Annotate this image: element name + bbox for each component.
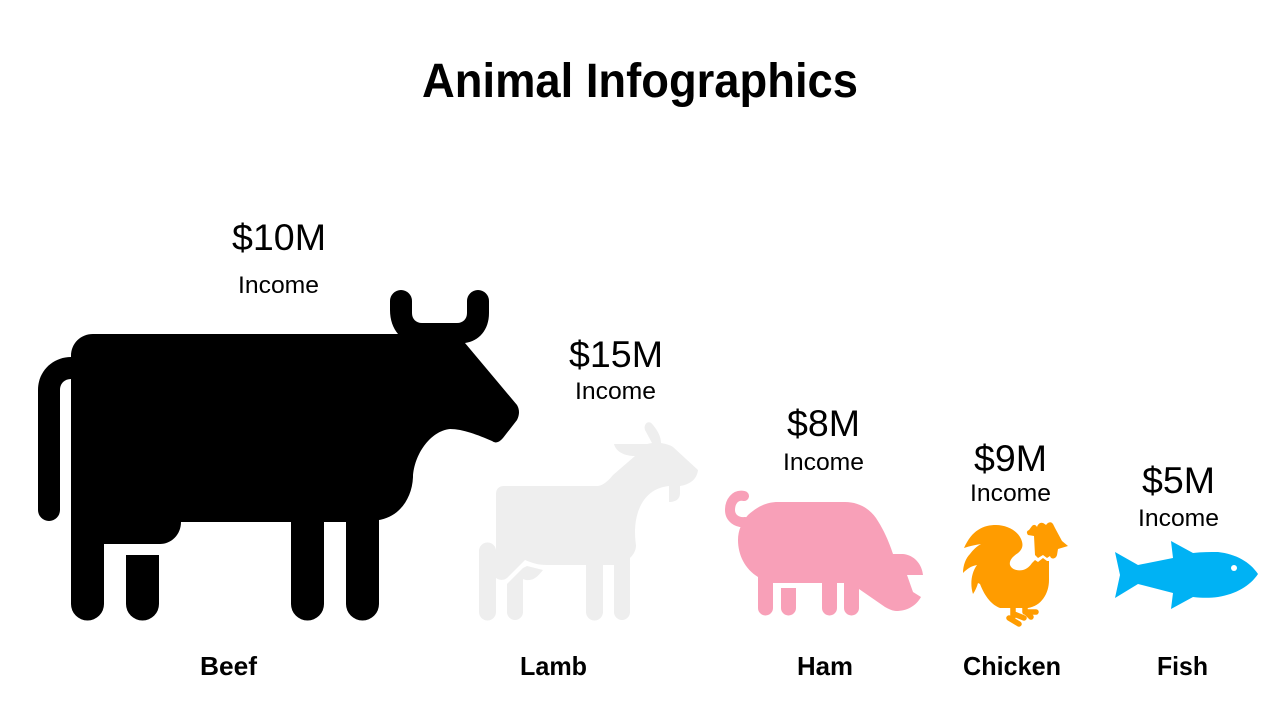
- ham income value: $8M: [787, 403, 860, 444]
- panel: fish: [1115, 460, 1258, 681]
- chicken income value: $9M: [974, 438, 1047, 479]
- icon: fish: [1115, 541, 1258, 609]
- title: Animal Infographics: [422, 55, 858, 108]
- fish income caption: Income: [1138, 505, 1219, 532]
- panel: beef: [38, 217, 519, 681]
- lamb income caption: Income: [575, 378, 656, 405]
- ham label: Ham: [797, 651, 853, 681]
- panel: lamb: [479, 334, 698, 681]
- icon: rooster: [963, 522, 1068, 624]
- icon: goat: [479, 422, 698, 620]
- ham income caption: Income: [783, 449, 864, 476]
- icon: cow: [38, 290, 519, 620]
- chicken label: Chicken: [963, 651, 1061, 681]
- fish label: Fish: [1157, 651, 1208, 681]
- chicken income caption: Income: [970, 480, 1051, 507]
- panel: chicken: [963, 438, 1068, 681]
- beef income caption: Income: [238, 272, 319, 299]
- panel: ham: [730, 403, 923, 681]
- lamb label: Lamb: [520, 651, 587, 681]
- fish income value: $5M: [1142, 460, 1215, 501]
- beef income value: $10M: [232, 217, 326, 258]
- beef label: Beef: [200, 651, 257, 681]
- lamb income value: $15M: [569, 334, 663, 375]
- icon: pig: [730, 496, 923, 616]
